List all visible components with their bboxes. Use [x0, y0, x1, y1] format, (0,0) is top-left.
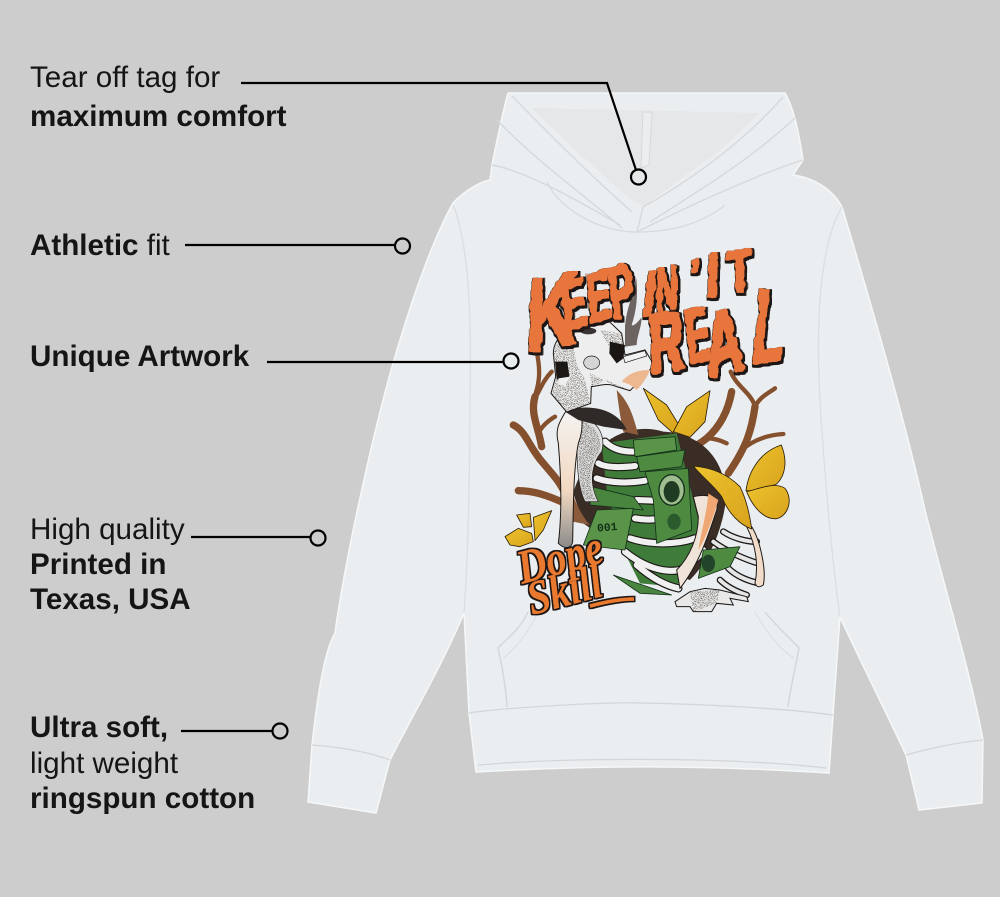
artwork lettering: Keepin' It Real: R: [647, 291, 685, 392]
waist band: [469, 703, 833, 768]
marker: [631, 170, 646, 184]
bill portraits: [597, 475, 715, 572]
spine and hip curve: [677, 495, 717, 588]
butterfly top: [643, 388, 710, 437]
artwork lettering: Keepin' It Real: I: [706, 242, 721, 309]
neck: [565, 408, 627, 430]
leader line: [191, 536, 310, 538]
hood tag: [641, 112, 652, 168]
rib outlines: [597, 442, 703, 588]
hoodie silhouette: [308, 93, 983, 813]
eye socket: [555, 362, 569, 384]
teeth: [623, 351, 647, 363]
arm bone: [557, 407, 582, 548]
nose bone: [558, 377, 570, 386]
cuffs: [312, 740, 983, 760]
orange bone tint: [698, 493, 718, 550]
smoke: [625, 277, 642, 347]
callout: printed in Texas: [30, 513, 326, 616]
artwork lettering: Dope Skill: Dope: [510, 521, 608, 595]
skull: [551, 321, 654, 412]
collar seam: [547, 182, 725, 232]
label bold line 1: Ultra soft,: [30, 711, 168, 744]
leader line: [185, 244, 394, 246]
hoodie: [308, 93, 983, 813]
artwork lettering: Keepin' It Real: ': [689, 251, 701, 302]
lower rib arc: [747, 527, 764, 587]
marker: [310, 530, 326, 546]
bottom ribs: [597, 442, 760, 595]
artwork lettering: Keepin' It Real: E: [558, 262, 590, 346]
label bold line 2: ringspun cotton: [30, 782, 255, 815]
finger bones: [675, 588, 748, 612]
pocket double stitch: [503, 612, 794, 658]
artwork lettering: Keepin' It Real: T: [726, 236, 753, 307]
brow: [580, 328, 596, 334]
label bold: maximum comfort: [30, 100, 287, 133]
artwork lettering: Keepin' It Real: A: [702, 287, 746, 398]
hood folds: [492, 96, 803, 232]
upper arm stipple: [579, 420, 600, 501]
marker: [272, 724, 288, 738]
butterfly right: [693, 445, 789, 529]
dark ribcage mass: [573, 429, 726, 580]
artwork lettering: Keepin' It Real: L: [748, 263, 792, 387]
callout: ringspun cotton: [30, 711, 288, 815]
skull stipple: [551, 330, 630, 412]
sleeve seams: [453, 205, 842, 617]
label bold line 2: Texas, USA: [30, 583, 191, 616]
artwork lettering: Keepin' It Real: P: [604, 247, 639, 336]
artwork lettering: Keepin' It Real: [524, 236, 792, 398]
leader line: [181, 730, 272, 732]
label regular: High quality: [30, 513, 185, 546]
small bill seal: [667, 514, 681, 530]
callout: tear off tag: [30, 61, 646, 184]
artwork lettering: Keepin' It Real: N: [656, 253, 678, 326]
right rib outlines: [713, 532, 760, 595]
artwork lettering: Keepin' It Real: I: [641, 257, 660, 330]
portrait shade: [664, 481, 680, 502]
artwork: [505, 277, 789, 612]
leader line: [241, 83, 636, 170]
leader line: [267, 361, 503, 363]
finger stipple: [690, 590, 720, 612]
portrait oval: [659, 475, 684, 505]
mouth: [609, 342, 625, 363]
label bold line 1: Printed in: [30, 548, 166, 581]
label: Unique Artwork: [30, 340, 250, 373]
tongue: [622, 370, 650, 390]
upper arm: [577, 415, 603, 502]
rib bones: [597, 442, 703, 588]
artwork lettering: Keepin' It Real: K: [524, 249, 579, 374]
marker: [395, 238, 410, 254]
label: Tear off tag for: [30, 61, 220, 94]
cheek: [584, 356, 600, 369]
artwork lettering: Dope Skill: Skill: [521, 554, 608, 625]
artwork lettering: Keepin' It Real: E: [682, 289, 713, 381]
artwork lettering: Dope Skill: [510, 521, 634, 625]
cranium: [551, 321, 654, 412]
right rib bones: [713, 532, 760, 595]
kangaroo pocket: [498, 612, 799, 707]
bill number: 001: [597, 522, 618, 536]
green cash behind ribs: [602, 433, 703, 587]
label regular: light weight: [30, 747, 178, 780]
marker: [504, 354, 518, 368]
brown chest highlights: [573, 390, 638, 525]
callout: unique artwork: [30, 340, 518, 373]
dollar bills: [583, 437, 740, 595]
lower bill seal: [702, 555, 715, 572]
callout: athletic fit: [30, 229, 410, 262]
butterfly small: [505, 511, 552, 547]
label: Athletic fit: [30, 229, 170, 262]
hood interior: [532, 108, 760, 207]
branches: [513, 352, 783, 503]
artwork lettering: Keepin' It Real: E: [583, 254, 614, 338]
